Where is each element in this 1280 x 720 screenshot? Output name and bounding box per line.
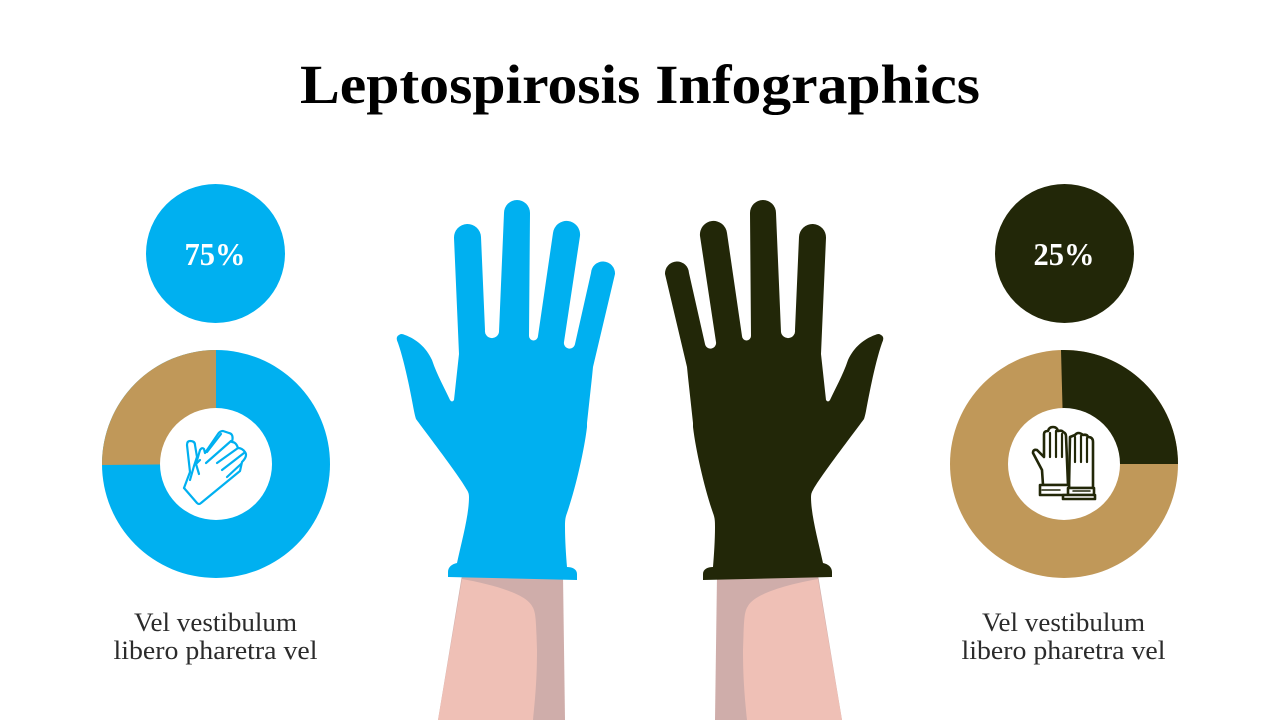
left caption: libero pharetra vel (114, 635, 318, 665)
title: Leptospirosis Infographics (300, 54, 980, 115)
illustration: left arm with blue glove (397, 200, 615, 720)
icon: clapping hands (184, 431, 246, 504)
left caption: Vel vestibulum (134, 607, 297, 637)
right percent badge (995, 184, 1134, 323)
left percent badge: 75% (184, 236, 246, 272)
icon: gloves (1033, 427, 1095, 499)
left percent badge (146, 184, 285, 323)
right percent badge: 25% (1034, 236, 1094, 272)
right caption (962, 607, 1166, 665)
illustration: right arm with dark glove (665, 200, 883, 720)
right caption: libero pharetra vel (962, 635, 1166, 665)
left donut chart (102, 350, 330, 578)
panel: right stat (950, 184, 1178, 665)
left caption (114, 607, 318, 665)
right donut chart (950, 350, 1178, 578)
right caption: Vel vestibulum (982, 607, 1145, 637)
panel: left stat (102, 184, 330, 665)
